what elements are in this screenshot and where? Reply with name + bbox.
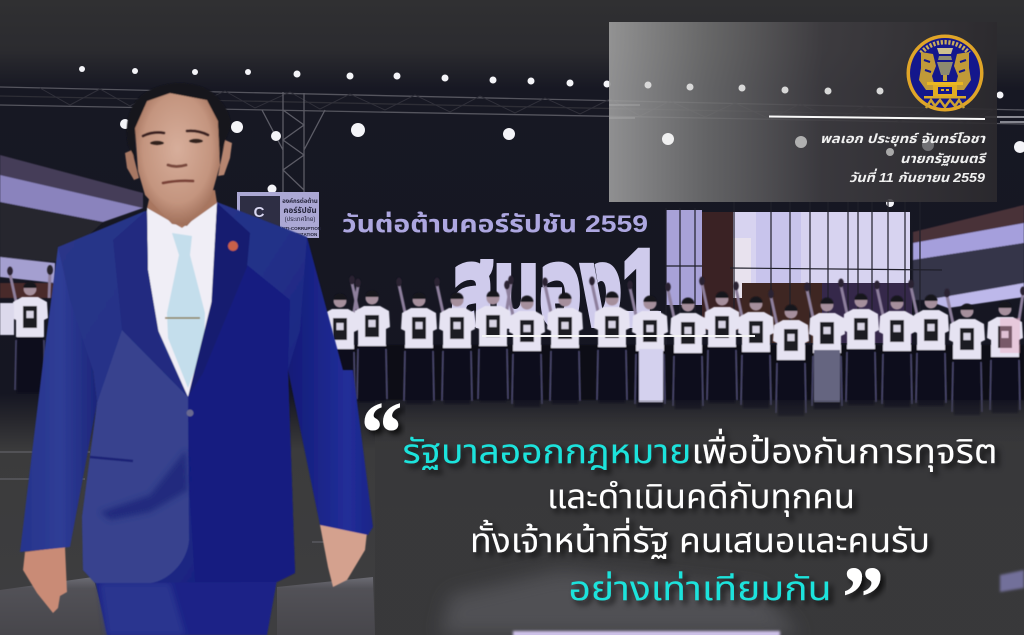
stage sign: anti-corruption organization logo: ANTI-CORRUPTION bbox=[279, 226, 321, 231]
pocket bbox=[90, 457, 133, 461]
hair bbox=[127, 83, 230, 158]
left lapel bbox=[113, 210, 188, 397]
left ear bbox=[125, 150, 139, 180]
floor left bbox=[0, 577, 110, 635]
right sleeve bbox=[288, 235, 373, 535]
panel spotlights bbox=[644, 82, 934, 156]
jacket front edge curve bbox=[82, 330, 189, 583]
person: prime minister bbox=[20, 83, 373, 635]
icon: government seal bbox=[906, 34, 984, 112]
right stage stripes bbox=[913, 205, 1024, 308]
caption divider bbox=[769, 116, 985, 120]
cage set bbox=[666, 200, 942, 345]
quote line 4: อย่างเท่าเทียมกัน bbox=[568, 570, 832, 608]
stage sign: anti-corruption organization logo: C bbox=[254, 204, 265, 221]
right ear bbox=[218, 140, 232, 176]
spotlights bbox=[79, 66, 1024, 207]
right floor stripe bbox=[1000, 570, 1024, 592]
row of people on stage bbox=[0, 265, 1024, 416]
left hand bbox=[23, 547, 67, 613]
lavender floor strip bbox=[513, 631, 780, 635]
stage sign: anti-corruption organization logo: ORGANIZATION bbox=[283, 232, 317, 237]
face bbox=[135, 93, 220, 226]
left sleeve bbox=[20, 240, 110, 552]
stage sign: anti-corruption organization logo: องค์กรต่อต้าน bbox=[282, 197, 318, 205]
shirt bbox=[147, 202, 217, 397]
jacket bbox=[58, 202, 307, 583]
caption: name, position and date: พลเอก ประยุทธ์ จันทร์โอชา bbox=[820, 131, 987, 147]
stage sign: anti-corruption organization logo: คอร์รัปชัน bbox=[283, 205, 317, 215]
tie bbox=[167, 233, 205, 388]
lapel pin bbox=[228, 241, 238, 251]
caption: name, position and date bbox=[820, 131, 987, 185]
translucent caption panel bbox=[609, 22, 997, 202]
stage white line bbox=[482, 335, 755, 337]
lighting truss bbox=[0, 87, 1024, 192]
quote line 3: ทั้งเจ้าหน้าที่รัฐ คนเสนอและคนรับ bbox=[470, 517, 930, 560]
trouser highlight bbox=[100, 583, 185, 635]
quote bbox=[402, 428, 998, 608]
jacket right dark panel bbox=[188, 265, 295, 582]
opening quotation mark: “ bbox=[356, 384, 401, 483]
right lapel bbox=[188, 203, 250, 397]
caption: name, position and date: วันที่ 11 กันยายน 2559 bbox=[849, 168, 986, 185]
floor glow below quote bbox=[440, 570, 800, 635]
right hand bbox=[320, 525, 367, 587]
button bbox=[186, 410, 194, 416]
facial features bbox=[143, 131, 208, 183]
stage sign: anti-corruption organization logo: (ประเทศไทย) bbox=[285, 217, 315, 223]
neck bbox=[147, 190, 217, 228]
caption: name, position and date: นายกรัฐมนตรี bbox=[900, 151, 987, 166]
stage sign: anti-corruption organization logo bbox=[237, 192, 321, 238]
quote line 1: รัฐบาลออกกฎหมาย เพื่อป้องกันการทุจริต bbox=[402, 428, 998, 472]
floor right bbox=[277, 577, 375, 635]
stage heading: วันต่อต้านคอร์รัปชัน 2559 bbox=[342, 210, 648, 238]
left stage stripes bbox=[0, 155, 143, 298]
quote line 2: และดำเนินคดีกับทุกคน bbox=[547, 478, 855, 517]
trousers bbox=[95, 580, 277, 635]
overlay behind quote bbox=[375, 400, 1024, 635]
tie clip bbox=[165, 317, 200, 319]
jacket shade fold bbox=[100, 450, 188, 520]
faint truss reflections on the floor bbox=[0, 452, 325, 542]
backdrop word: สนอง1 bbox=[451, 227, 661, 348]
